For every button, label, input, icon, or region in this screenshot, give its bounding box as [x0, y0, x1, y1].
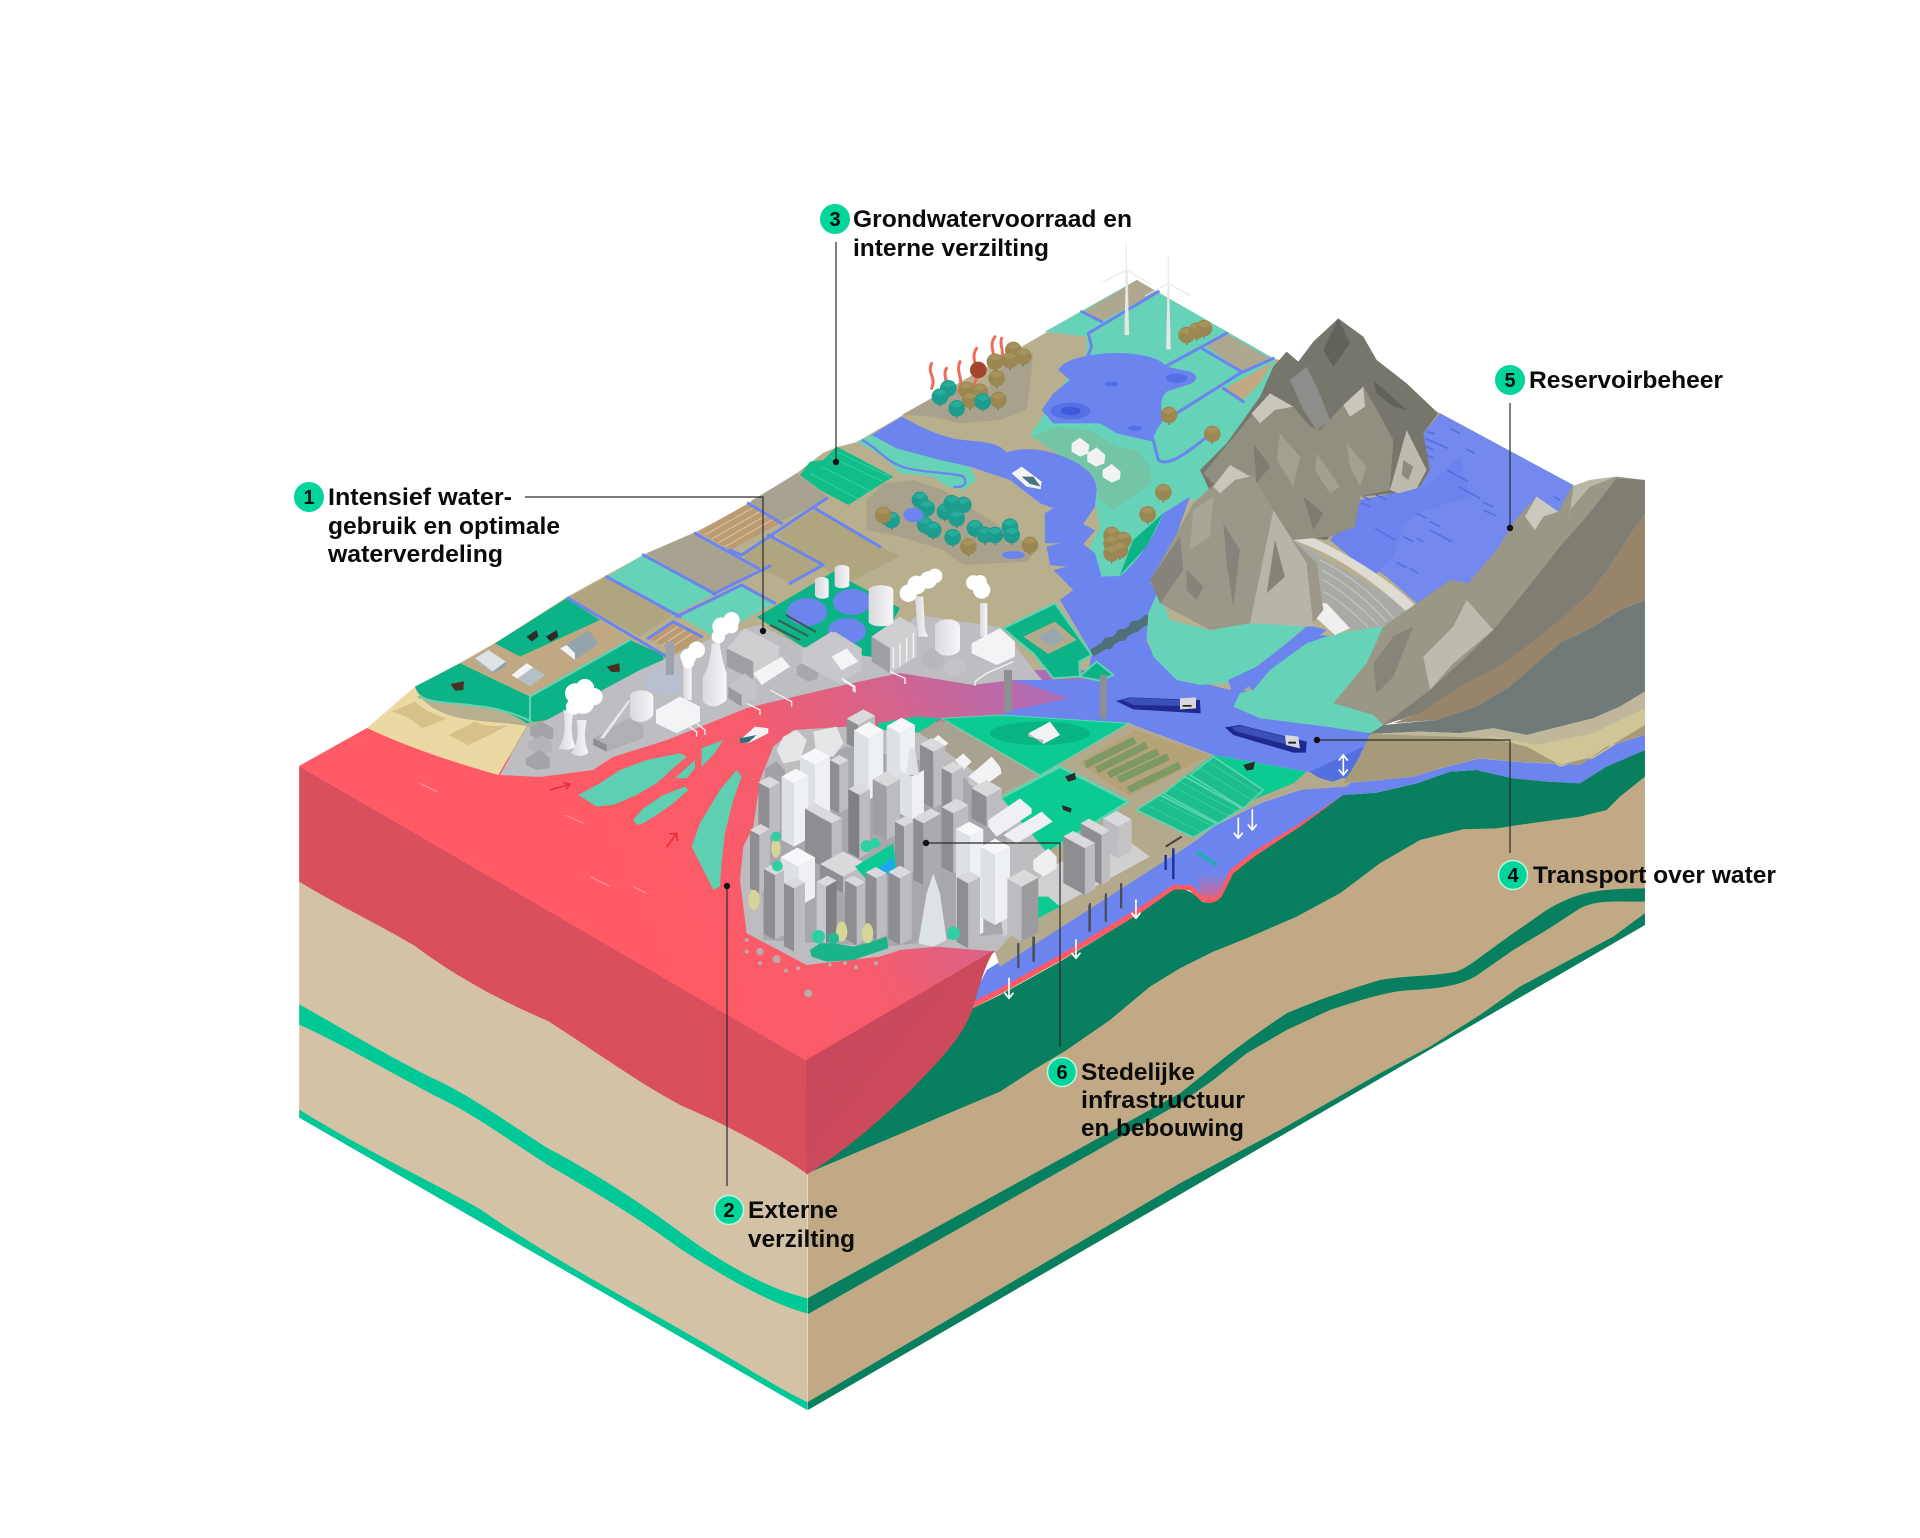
farm buildings: [475, 630, 598, 687]
tanks: [815, 565, 848, 598]
river barrier piers: [1004, 670, 1012, 712]
label 2: Externe verzilting: verzilting: [748, 1226, 855, 1253]
city greenery: [748, 832, 960, 962]
boat on the river: [738, 727, 768, 743]
label 1: Intensief watergebruik en optimale waterverdeling: Intensief water-: [328, 484, 512, 511]
dark green wedge: [1120, 513, 1163, 575]
meadow with houses: [1032, 427, 1152, 510]
upper land: fields, lake, forest and river: [800, 243, 1387, 782]
red block corner wedge, right face: [806, 950, 995, 1175]
orange striped crop fields: [698, 503, 780, 550]
label 4: Transport over water: Transport over water: [1533, 862, 1776, 889]
polder canals: [1082, 292, 1273, 462]
white tops on gray patch: [930, 735, 948, 752]
striped green field, marker 3: [800, 447, 893, 505]
teal pipe: [1197, 852, 1217, 865]
city ground: [740, 709, 1150, 997]
white boat: [1012, 467, 1042, 489]
label 4: Transport over water: 4: [1507, 865, 1519, 887]
cows on the fields: [1062, 762, 1255, 813]
label 6: Stedelijke infrastructuur en bebouwing: en bebouwing: [1081, 1115, 1244, 1142]
label 1: Intensief watergebruik en optimale waterverdeling: waterverdeling: [327, 541, 503, 568]
label 2: Externe verzilting: Externe: [748, 1197, 838, 1224]
label 2: Externe verzilting: [714, 883, 855, 1253]
freshwater strip above the aquifer: [970, 735, 1645, 1003]
label 3: Grondwatervoorraad en interne verzilting: [820, 204, 1132, 465]
label 6: Stedelijke infrastructuur en bebouwing: [923, 840, 1245, 1142]
subsidence droplets on the shore: [745, 938, 878, 997]
right face of the block: [808, 737, 1645, 1410]
white seepage arrows: [1005, 810, 1256, 998]
top surface land base: [415, 280, 1573, 770]
white houses: [1072, 438, 1121, 483]
front peak: [1150, 465, 1323, 630]
drinking water wells and pipes: [1018, 883, 1121, 968]
label 2: Externe verzilting: 2: [723, 1200, 735, 1222]
bottom green band, right face: [808, 913, 1645, 1410]
groundwater aquifer, dark green layer: [808, 750, 1645, 1173]
forest patches: [902, 353, 1033, 423]
dam wall: [1293, 540, 1413, 630]
pastures and farmyard: [415, 598, 663, 723]
mint floodplain below the dam: [1147, 590, 1393, 733]
farm fields with irrigation canals: [568, 473, 900, 657]
label 1: Intensief watergebruik en optimale waterverdeling: 1: [303, 487, 315, 509]
cooling towers and stacks: [558, 643, 727, 756]
industrial zone ground: [500, 615, 1050, 777]
skyscrapers: [750, 709, 1132, 952]
label 5: Reservoirbeheer: [1495, 365, 1723, 531]
crop field with rows: [1078, 730, 1210, 797]
label 4: Transport over water: [1314, 737, 1776, 890]
reservoir, mountains and dam: [1150, 318, 1645, 783]
ships on the waterway: [1116, 697, 1307, 753]
sluice darker basin: [1310, 747, 1363, 782]
wind turbines: [1103, 243, 1191, 349]
salt intrusion plume in groundwater: [1197, 873, 1227, 899]
main river and harbour water: [872, 417, 1387, 782]
left face of the block: [299, 766, 808, 1410]
striped green fields: [1137, 755, 1307, 823]
lower meadow: [997, 767, 1128, 853]
storm surge barrier: [1090, 613, 1152, 657]
central massif: [1203, 387, 1393, 540]
label 6: Stedelijke infrastructuur en bebouwing: 6: [1056, 1062, 1068, 1084]
industry, buildings and cooling towers: [526, 565, 862, 770]
small forest pond: [903, 508, 923, 522]
lake: [1042, 353, 1196, 442]
label 6: Stedelijke infrastructuur en bebouwing: Stedelijke: [1081, 1059, 1195, 1086]
label 1: Intensief watergebruik en optimale waterverdeling: gebruik en optimale: [328, 513, 560, 540]
upper right face layers: [1393, 513, 1645, 723]
darker mid-city mass behind the towers: [760, 747, 1007, 947]
gate on inlet: [1232, 677, 1253, 694]
estuary islands: [578, 740, 742, 890]
right ridge: [1333, 477, 1645, 725]
lower land: tan ground, farm fields: [867, 673, 1363, 998]
sea and salinised river: [299, 670, 1120, 1062]
factory at the east end: [802, 565, 1015, 693]
label 6: Stedelijke infrastructuur en bebouwing: infrastructuur: [1081, 1087, 1245, 1114]
red salt-water stripe along groundwater: [970, 792, 1345, 1003]
coastal parcel with building: [1003, 603, 1092, 678]
mint polder land: [1030, 280, 1300, 577]
flames: [930, 337, 1002, 392]
green plot with round water treatment ponds: [757, 572, 900, 657]
label 1: Intensief watergebruik en optimale waterverdeling: [294, 482, 766, 634]
label 5: Reservoirbeheer: 5: [1504, 370, 1516, 392]
grey sheds: [526, 628, 862, 770]
white low-rise at the back: [777, 727, 843, 763]
label 5: Reservoirbeheer: Reservoirbeheer: [1529, 367, 1723, 394]
mint strip with meander: [857, 435, 977, 490]
outfall pipes: [687, 680, 853, 737]
irrigation canals: [568, 498, 880, 657]
faint wave marks on the sea: [420, 783, 647, 893]
label 3: Grondwatervoorraad en interne verzilting: Grondwatervoorraad en: [853, 206, 1132, 233]
trees: [875, 320, 1221, 563]
pocket park with pond: [855, 843, 897, 883]
main mountain, dark rear ridge: [1200, 318, 1438, 540]
reservoir water: [1330, 413, 1577, 603]
label 3: Grondwatervoorraad en interne verzilting: interne verzilting: [853, 235, 1049, 262]
deep green band, right face: [808, 888, 1645, 1314]
label 3: Grondwatervoorraad en interne verzilting: 3: [829, 209, 841, 231]
double arrow: water level: [1339, 755, 1347, 775]
red inflow arrows: [550, 783, 677, 847]
building foundations: piles in the groundwater: [1018, 883, 1121, 968]
green meadow: [942, 715, 1128, 775]
barn: [1028, 722, 1060, 744]
upper green band, left face: [299, 1004, 808, 1313]
factory smoke: [565, 612, 740, 715]
cows and horses: [451, 630, 620, 691]
plot with right hand towers: [1000, 830, 1150, 937]
dunes: sand area at the coast: [367, 687, 527, 775]
salt water layer, left face: [299, 766, 808, 1174]
lower green band, left face: [299, 1110, 808, 1410]
